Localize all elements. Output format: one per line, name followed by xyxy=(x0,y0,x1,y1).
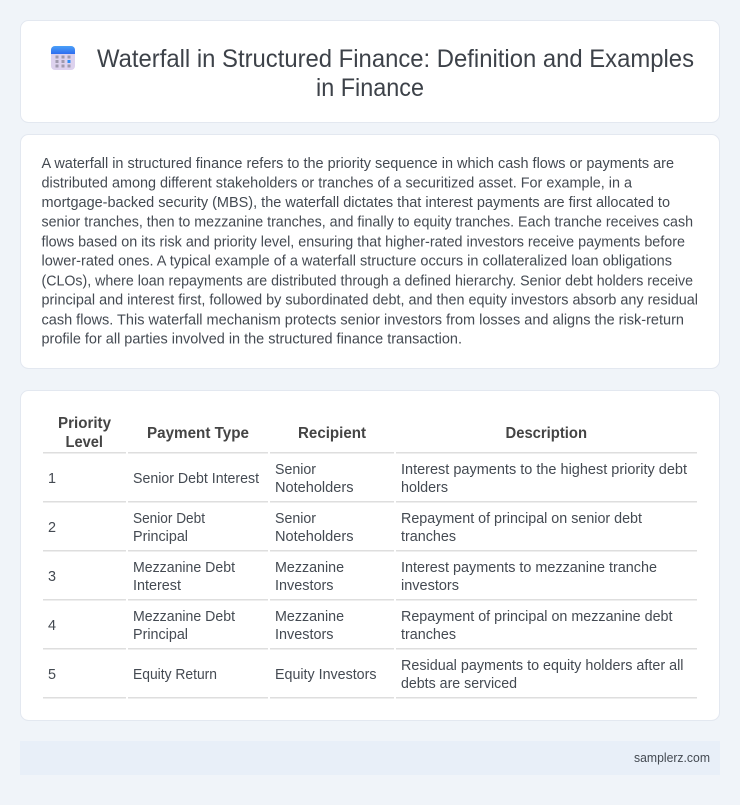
icon: calendar xyxy=(51,46,75,70)
table row 2: tranches xyxy=(401,529,456,545)
table row 5 xyxy=(48,658,684,692)
table row 4: tranches xyxy=(401,627,456,643)
table row 2 xyxy=(48,511,642,545)
table row 5: Residual payments to equity holders after all xyxy=(401,658,684,674)
text block: definition: principal and interest first, followed by subordinated debt, and then equity investors absorb any residual xyxy=(42,292,698,308)
text block: definition: flows based on its risk and priority level, ensuring that higher-rated investors receive payments before xyxy=(42,234,685,250)
text block: definition: cash flows. This waterfall mechanism protects senior investors from losses and aligns the risk-return xyxy=(42,312,684,328)
table header: Recipient xyxy=(298,425,366,442)
table row 3: Investors xyxy=(275,578,334,594)
table header: Description xyxy=(506,425,587,442)
table header: Level xyxy=(66,434,103,451)
panel: title card xyxy=(20,20,720,122)
text block: definition: senior tranches, then to mezzanine tranches, and finally to equity tranches. Each tranche receives cash xyxy=(42,214,693,230)
table row 1: Noteholders xyxy=(275,480,354,496)
table row 3: Mezzanine Debt xyxy=(133,560,235,576)
text block: definition: A waterfall in structured finance refers to the priority sequence in which cash flows or payments are xyxy=(42,156,674,172)
table row 1: Interest payments to the highest priority debt xyxy=(401,462,687,478)
table row 4 xyxy=(48,609,672,643)
table row 5: Equity Return xyxy=(133,667,217,683)
text block: definition: distributed among different stakeholders or tranches of a securitized asset. For example, in a xyxy=(42,176,632,192)
table row 1: holders xyxy=(401,480,448,496)
title: Waterfall in Structured Finance: Definition and Examples xyxy=(97,45,694,73)
table row 3: investors xyxy=(401,578,459,594)
text block: definition: mortgage-backed security (MBS), the waterfall dictates that interest payments are first allocated to xyxy=(42,195,670,211)
table header xyxy=(58,415,587,451)
table row 2: 2 xyxy=(48,520,56,536)
table row 3: Mezzanine xyxy=(275,560,344,576)
table row 2: Repayment of principal on senior debt xyxy=(401,511,642,527)
table row 4: Mezzanine xyxy=(275,609,344,625)
table row 5: Equity Investors xyxy=(275,667,376,683)
table row 5: debts are serviced xyxy=(401,676,517,692)
table row 3 xyxy=(48,560,657,594)
footer: samplerz.com xyxy=(634,750,710,765)
table row 1: 1 xyxy=(48,471,56,487)
text block: definition: lower-rated ones. A typical example of a waterfall structure occurs in collateralized loan obligations xyxy=(42,254,672,270)
table row 4: Investors xyxy=(275,627,334,643)
panel: payment priority table xyxy=(20,390,720,720)
table row 2: Noteholders xyxy=(275,529,354,545)
text block: definition: profile for all parties involved in the structured finance transaction. xyxy=(42,332,462,348)
table row 3: 3 xyxy=(48,569,56,585)
table row 2: Senior Debt xyxy=(133,511,205,527)
text block: definition xyxy=(42,156,698,348)
footer xyxy=(20,741,720,775)
table row 4: Repayment of principal on mezzanine debt xyxy=(401,609,672,625)
text block: definition: (CLOs), where loan repayments are distributed through a defined hierarchy. Senior debt holders receive xyxy=(42,274,693,290)
table row 1: Senior Debt Interest xyxy=(133,471,259,487)
table row 4: Mezzanine Debt xyxy=(133,609,235,625)
table row 2: Senior xyxy=(275,511,316,527)
table row 1 xyxy=(48,462,687,496)
table row 4: 4 xyxy=(48,618,56,634)
table header: Priority xyxy=(58,415,111,432)
title xyxy=(97,45,694,102)
table row 5: 5 xyxy=(48,667,56,683)
table header: Payment Type xyxy=(147,425,249,442)
table row 4: Principal xyxy=(133,627,188,643)
table row 2: Principal xyxy=(133,529,188,545)
panel: definition paragraph xyxy=(20,134,720,368)
table row 3: Interest payments to mezzanine tranche xyxy=(401,560,657,576)
title: in Finance xyxy=(316,74,424,102)
table row 3: Interest xyxy=(133,578,181,594)
table row 1: Senior xyxy=(275,462,316,478)
